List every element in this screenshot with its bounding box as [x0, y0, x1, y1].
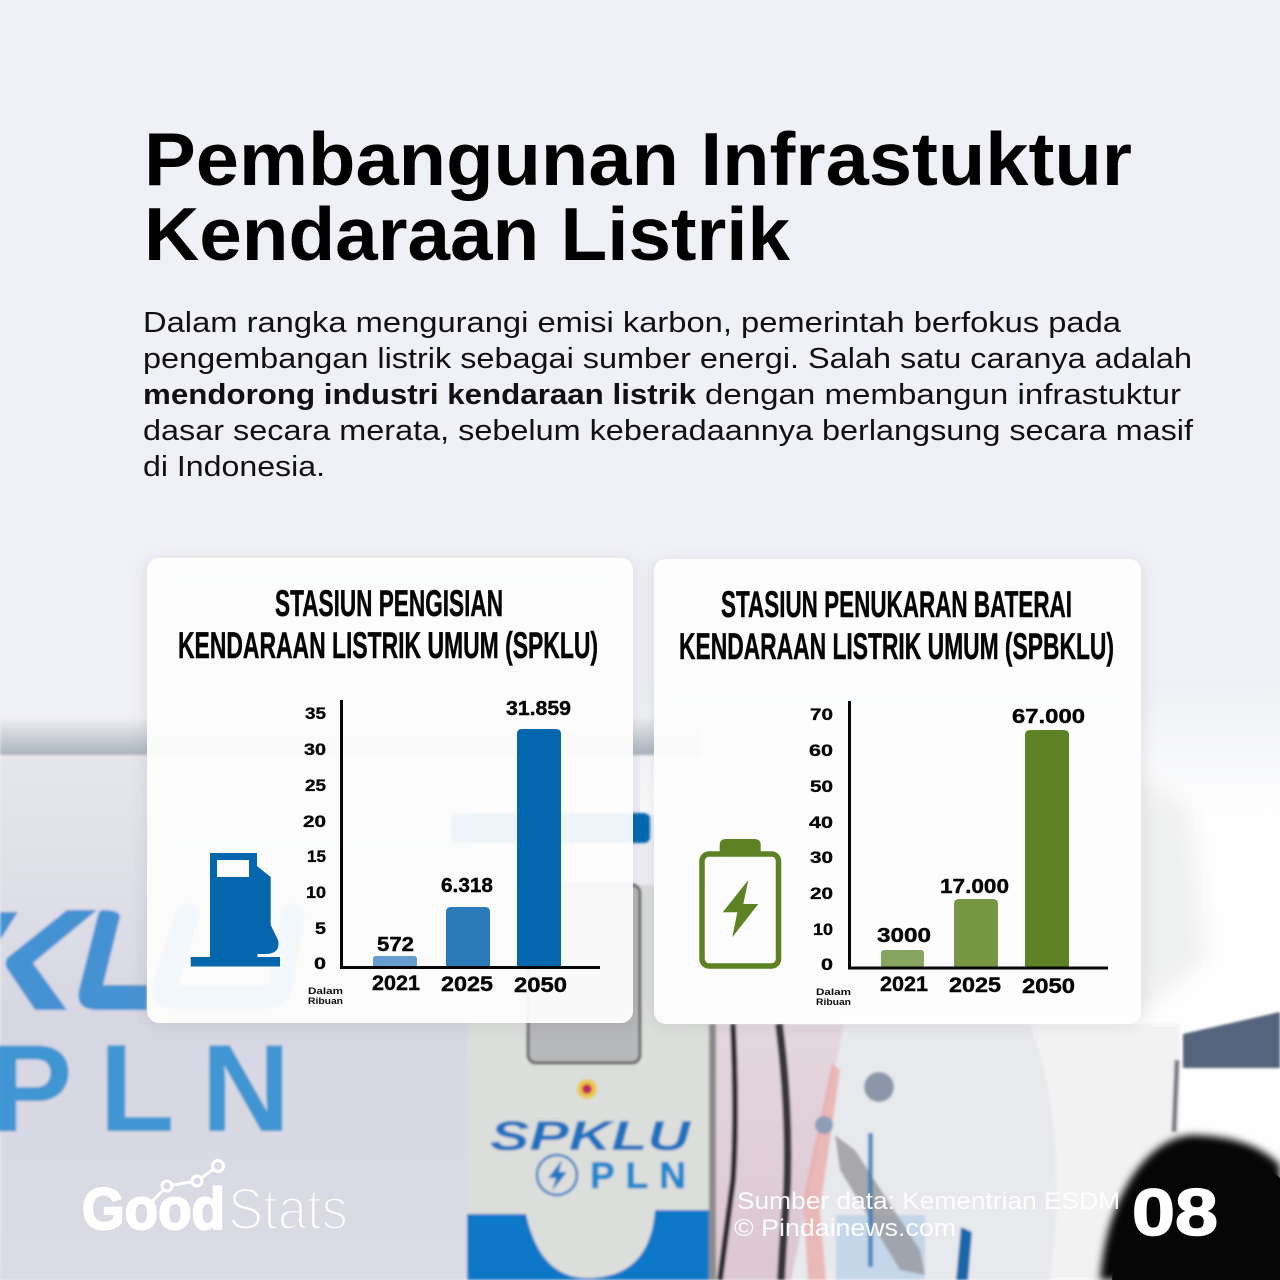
logo: GoodStats [82, 1160, 348, 1242]
panel heading: SPKLU: STASIUN PENGISIAN [275, 583, 503, 624]
y axis labels: 30 [810, 848, 833, 867]
y axis labels: 20 [303, 812, 326, 831]
intro paragraph: dasar secara merata, sebelum keberadaannya berlangsung secara masif [143, 415, 1194, 447]
y axis labels: 20 [810, 884, 833, 903]
panel: SPKLU [147, 558, 633, 1023]
y axis labels: 25 [305, 776, 326, 795]
y axis labels: 5 [315, 919, 326, 938]
y axis labels: 70 [810, 705, 833, 724]
bar value labels [377, 698, 571, 956]
card shadow [147, 562, 1141, 1024]
y axis labels: 50 [810, 777, 833, 796]
intro paragraph: dengan membangun infrastuktur [705, 379, 1181, 411]
intro paragraph: pengembangan listrik sebagai sumber energi. Salah satu caranya adalah [143, 343, 1192, 375]
car [791, 1024, 1180, 1280]
x axis years [880, 973, 1075, 998]
x axis years [372, 972, 567, 997]
source note [734, 1188, 1120, 1242]
intro paragraph: di Indonesia. [143, 451, 325, 483]
wall with PLN sign [0, 718, 700, 1280]
unit note [816, 987, 851, 1008]
title [144, 117, 1132, 276]
source note: Sumber data: Kementrian ESDM [737, 1188, 1120, 1215]
charger unit: SPKLU [490, 1112, 692, 1159]
bar value labels: 572 [377, 934, 414, 956]
panel: SPBKLU [654, 559, 1141, 1024]
icon: fuel pump [191, 853, 280, 966]
unit note [308, 986, 343, 1007]
bar value labels: 3000 [877, 925, 931, 947]
bar value labels: 67.000 [1012, 706, 1085, 728]
y axis labels: 30 [304, 740, 326, 759]
x axis years: 2050 [514, 974, 567, 997]
y axis labels: 35 [305, 704, 326, 723]
dark foreground blob [1100, 1135, 1280, 1280]
y axis labels [809, 705, 833, 974]
charger unit [467, 885, 709, 1280]
x axis years: 2021 [880, 973, 928, 996]
bar value labels: 6.318 [441, 875, 493, 897]
x axis years: 2025 [949, 974, 1001, 997]
y axis labels: 40 [809, 813, 833, 832]
icon: battery [702, 839, 778, 966]
title: Kendaraan Listrik [144, 192, 790, 276]
y axis labels [303, 704, 326, 973]
cables and wall [709, 1024, 849, 1280]
bar chart: SPKLU [303, 698, 600, 1007]
logo: GoodStats: Good [82, 1177, 225, 1242]
y axis labels: 10 [813, 920, 833, 939]
title: Pembangunan Infrastuktur [144, 117, 1132, 201]
panel heading: SPKLU [178, 583, 598, 666]
background photo: charging station [0, 718, 1280, 1280]
y axis labels: 10 [306, 883, 326, 902]
logo: GoodStats: Stats [228, 1177, 348, 1242]
intro paragraph: Dalam rangka mengurangi emisi karbon, pemerintah berfokus pada [143, 307, 1122, 339]
y axis labels: 15 [307, 847, 326, 866]
x axis years: 2025 [441, 973, 493, 996]
intro paragraph [143, 307, 1194, 483]
source note: © Pindainews.com [734, 1215, 956, 1242]
bar value labels: 17.000 [940, 876, 1009, 898]
dark window [1174, 1012, 1280, 1132]
wall with PLN sign: L [99, 1020, 175, 1158]
x axis years: 2050 [1022, 975, 1075, 998]
unit note: Dalam [816, 987, 851, 998]
bar chart: SPBKLU [809, 701, 1108, 1008]
unit note: Ribuan [308, 996, 343, 1007]
y axis labels: 0 [314, 954, 326, 973]
x axis years: 2021 [372, 972, 420, 995]
intro paragraph: mendorong industri kendaraan listrik [143, 379, 697, 411]
unit note: Dalam [308, 986, 343, 997]
unit note: Ribuan [816, 997, 851, 1008]
panel heading: SPBKLU [679, 584, 1114, 667]
bar value labels [877, 706, 1085, 947]
y axis labels: 0 [821, 955, 833, 974]
bar value labels: 31.859 [506, 698, 571, 720]
charger unit: PLN [590, 1155, 686, 1196]
wall with PLN sign: N [201, 1020, 291, 1158]
y axis labels: 60 [809, 741, 833, 760]
page number: 08 [1132, 1175, 1218, 1249]
bars [881, 730, 1069, 968]
panel heading: SPKLU: KENDARAAN LISTRIK UMUM (SPKLU) [178, 625, 598, 666]
bars [373, 729, 561, 967]
